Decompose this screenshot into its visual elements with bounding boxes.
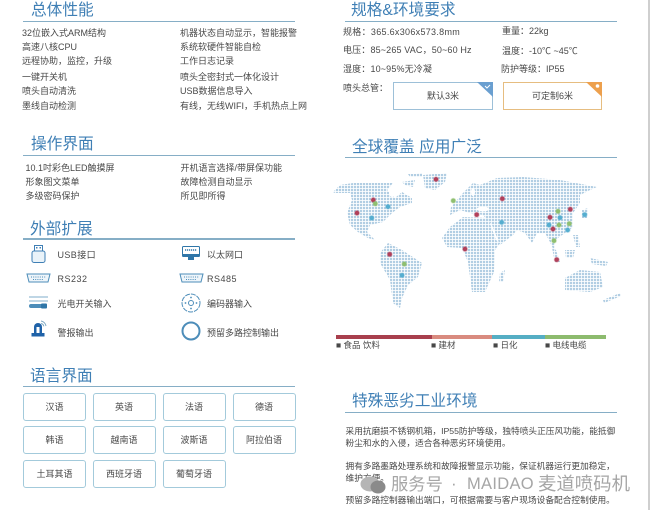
language button grid: 阿拉伯语 [246,435,282,445]
label: nozzle hose: 喷头总管： [343,82,388,92]
heading: operation interface: 操作界面 [31,136,94,153]
watermark text: 服务号 [391,474,443,494]
option card: default 3m [393,82,493,110]
paragraph: enclosure: 粉尘和水的入侵，适合各种恶劣环境使用。 [346,438,511,448]
operation list: right column: 开机语言选择/带屏保功能 [180,162,282,172]
legend bar [336,335,606,339]
watermark text [391,473,630,494]
label: reserved multi-channel output: 预留多路控制输出 [207,328,279,338]
paragraph: ink circuit [346,460,615,482]
icon: RS232 [26,274,51,282]
spec table: 重量：22kg [502,26,549,36]
language button grid: 西班牙语 [106,469,142,479]
panel: global coverage [333,138,620,350]
label: ethernet: 以太网口 [207,250,243,260]
language button grid: 土耳其语 [36,469,72,479]
heading: overall performance: 总体性能 [31,2,94,18]
icon: alarm light [32,320,46,336]
heading: external expansion: 外部扩展 [30,220,93,238]
icon: ethernet [182,246,200,260]
feature list: left column: 喷头自动清洗 [22,86,76,96]
language button grid: 德语 [255,402,273,412]
feature list: left column: 高速八核CPU [22,42,77,52]
option card: custom 6m: 可定制6米 [532,91,573,101]
language button grid: 越南语 [110,435,138,445]
language button grid: 韩语 [45,435,64,445]
watermark [360,473,630,494]
icon: RS485 [179,274,204,282]
feature list: right column: 系统软硬件智能自检 [180,42,261,52]
operation list: left column [26,162,115,200]
operation list: right column: 故障检测自动显示 [180,176,253,186]
language button grid: 英语 [115,402,133,412]
legend: wire and cable: ■ 电线电缆 [545,340,586,350]
language button grid [23,393,296,488]
spec table [343,26,578,74]
option card: custom 6m [503,82,602,110]
language button grid: 波斯语 [180,435,208,445]
spec table: 电压：85~265 VAC，50~60 Hz [343,44,472,54]
icon: ring [182,322,200,340]
panel: specs and environment [343,1,617,110]
label: photoelectric switch: 光电开关输入 [58,298,112,308]
label: RS485: RS485 [207,274,237,284]
operation list: left column: 多级密码保护 [26,190,80,200]
feature list: left column: 墨线自动检测 [22,100,76,110]
label: encoder: 编码器输入 [207,298,252,308]
panel: overall performance [22,1,307,110]
feature list: right column: 机器状态自动显示，智能报警 [180,28,297,38]
paragraph: controller output: 预留多路控制器输出端口，可根据需要与客户现场设备配合控制使用。 [346,494,615,504]
dotted world map [333,173,620,308]
heading: specs and environment: 规格&环境要求 [351,2,456,18]
spec table: 温度：-10℃ ~45℃ [502,46,578,56]
operation list: left column: 10.1吋彩色LED触摸屏 [26,162,115,172]
paragraph: enclosure [346,426,615,448]
continents [333,173,621,308]
feature list: right column: 工作日志记录 [180,56,234,66]
icon: chat bubbles [360,476,386,494]
option card: default 3m: 默认3米 [427,91,459,101]
feature list: right column: 喷头全密封式一体化设计 [180,72,279,82]
feature list: right column: 有线，无线WIFI，手机热点上网 [180,100,307,110]
feature list: right column [180,28,307,110]
feature list: left column: 32位嵌入式ARM结构 [22,28,106,38]
panel: external expansion [23,220,295,340]
page edge line [648,0,650,510]
icon: check corner [477,82,493,97]
label: USB: USB接口 [58,250,96,260]
language button grid: 汉语 [45,402,64,412]
spec table: 规格：365.6x306x573.8mm [343,26,460,36]
panel: operation interface [23,136,295,200]
watermark text: 麦道喷码机 [538,473,630,494]
operation list: left column: 形象图文菜单 [26,176,80,186]
legend: food and beverage: ■ 食品 饮料 [336,340,380,350]
paragraph: ink circuit: 维护方便。 [346,472,389,482]
feature list: left column [22,28,112,110]
feature list: left column: 远程协助，监控，升级 [22,56,112,66]
region markers: wire and cable [373,198,572,266]
panel: language interface [23,367,296,488]
icon: photoelectric switch [29,296,48,308]
label: RS232: RS232 [58,274,88,284]
heading: language interface: 语言界面 [30,368,93,384]
paragraph: ink circuit: 拥有多路墨路处理系统和故障报警显示功能，保证机器运行更加稳定， [346,460,615,470]
legend: daily chemicals: ■ 日化 [493,340,518,350]
region markers: food and beverage [355,177,572,262]
panel: harsh industrial environments [345,392,617,504]
language button grid: 法语 [185,402,203,412]
paragraph: enclosure: 采用抗磨损不锈钢机箱，IP55防护等级，独特喷头正压风功能，能抵御 [346,426,615,436]
watermark text: MAIDAO [467,475,534,493]
icon: star corner [586,82,602,97]
region markers: daily chemicals [370,204,587,277]
feature list: right column: USB数据信息导入 [180,86,253,96]
heading: global coverage: 全球覆盖 应用广泛 [352,138,482,156]
icon: USB [32,245,46,263]
operation list: right column [180,162,282,200]
operation list: right column: 所见即所得 [180,190,226,200]
watermark text: · [451,474,457,493]
spec table: 防护等级：IP55 [501,64,565,74]
icon: encoder [182,294,200,312]
legend: building materials: ■ 建材 [431,340,456,350]
language button grid: 葡萄牙语 [176,469,212,479]
label: alarm output: 警报输出 [58,328,94,338]
feature list: left column: 一键开关机 [22,72,67,82]
heading: harsh industrial environments: 特殊恶劣工业环境 [352,393,478,410]
inland seas [389,188,489,212]
spec table: 湿度：10~95%无冷凝 [343,64,432,74]
